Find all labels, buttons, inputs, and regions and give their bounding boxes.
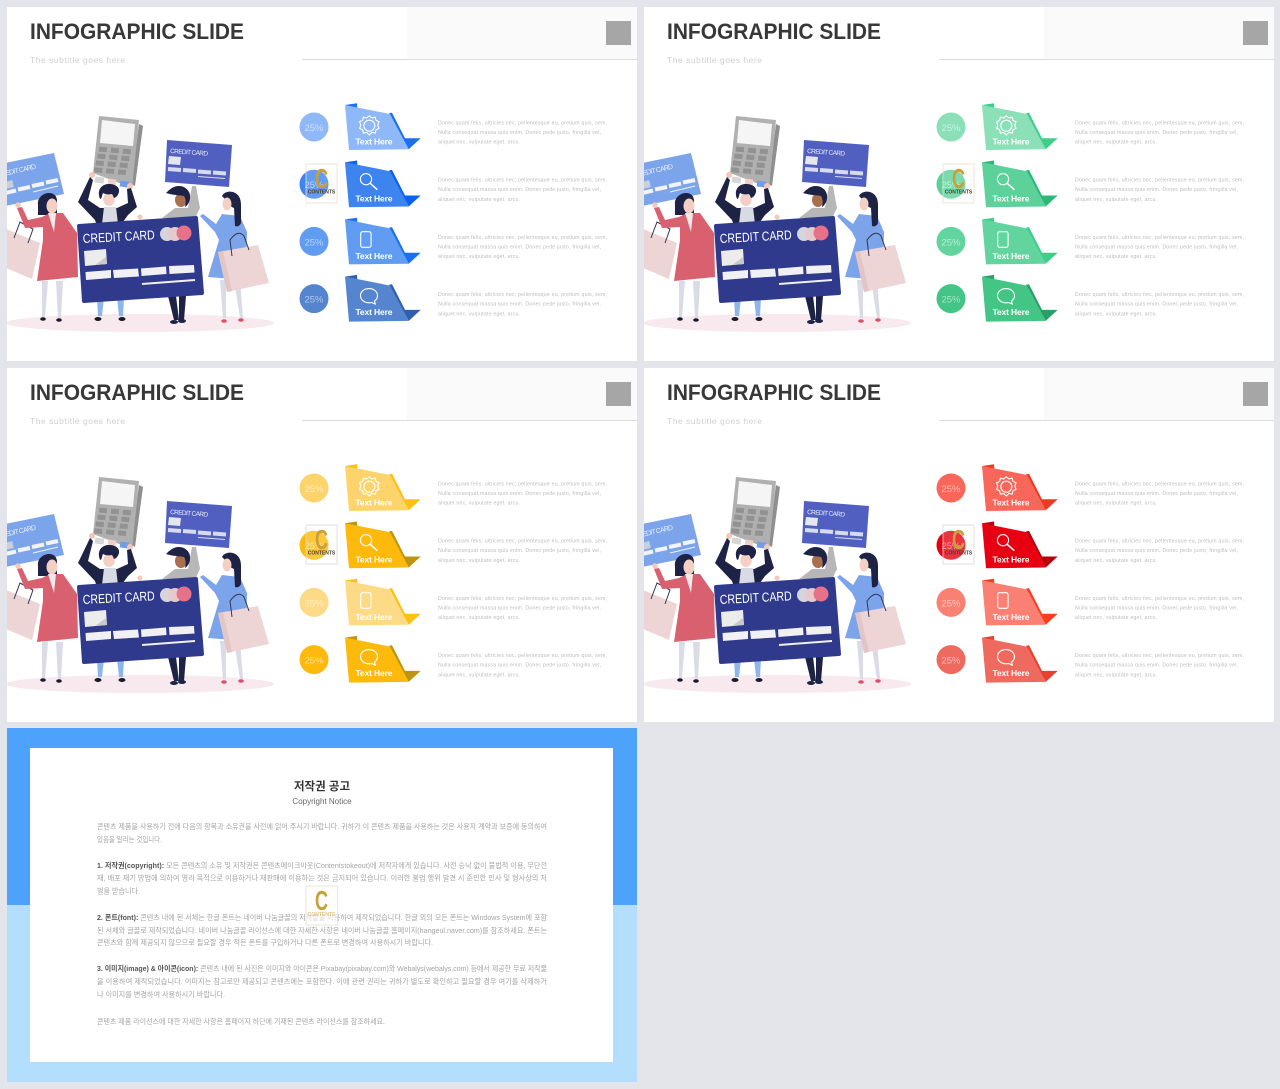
row 1: Donec quam felis, ultricies nec, pellentesque eu, pretium quis, sem, [438, 482, 607, 488]
row 4: aliquet nec, vulputate eget, arcu. [1075, 311, 1157, 317]
watermark [943, 524, 974, 564]
intro paragraph: 콘텐츠 제품을 사용하기 전에 다음의 항목과 소유권을 사전에 읽어 주시기 바랍니다. 귀하가 이 콘텐츠 제품을 사용하는 것은 사용자 계약과 보증에 동의하여 [97, 822, 547, 831]
section 2: font [97, 913, 547, 947]
row 4: Donec quam felis, ultricies nec, pellentesque eu, pretium quis, sem, [1075, 653, 1244, 659]
row 3: 25% [941, 598, 961, 609]
row 2 [300, 160, 607, 207]
row 2: Text Here [356, 555, 393, 565]
watermark: CONTENTS [945, 550, 973, 556]
illustration: people with credit cards [633, 116, 911, 332]
watermark: CONTENTS [308, 190, 336, 196]
row 4: aliquet nec, vulputate eget, arcu. [438, 672, 520, 678]
row 2: aliquet nec, vulputate eget, arcu. [438, 558, 520, 564]
section 3: image and icon [97, 964, 547, 999]
row 4: Donec quam felis, ultricies nec, pellentesque eu, pretium quis, sem, [438, 292, 607, 298]
illustration: people with credit cards [633, 477, 911, 693]
title: INFOGRAPHIC SLIDE [667, 380, 881, 405]
illustration: people with credit cards: CREDIT CARD [170, 148, 209, 158]
row 4: Text Here [992, 307, 1030, 317]
row 2: Text Here [992, 194, 1030, 204]
row 4: 25% [941, 295, 961, 306]
row 3 [936, 579, 1244, 625]
row 4: 25% [941, 656, 961, 667]
row 2: Donec quam felis, ultricies nec, pellentesque eu, pretium quis, sem, [1075, 539, 1244, 545]
row 2: Nulla consequat massa quis enim. Donec pede justo, fringilla vel, [1075, 187, 1238, 193]
title: INFOGRAPHIC SLIDE [667, 19, 881, 44]
watermark: C [952, 163, 965, 194]
watermark: C [952, 524, 965, 555]
row 2: 25% [941, 180, 961, 191]
grey square [1243, 382, 1268, 406]
row 2: 25% [304, 180, 324, 191]
watermark: CONTENTS [308, 912, 336, 918]
row 1: Nulla consequat massa quis enim. Donec pede justo, fringilla vel, [1075, 130, 1238, 136]
illustration: people with credit cards: CREDIT CARD [82, 588, 155, 607]
section 1: copyright [97, 861, 547, 896]
illustration: people with credit cards [0, 116, 274, 332]
row 1: aliquet nec, vulputate eget, arcu. [438, 140, 520, 146]
row 2: 25% [941, 541, 961, 552]
row 1: Nulla consequat massa quis enim. Donec pede justo, fringilla vel, [1075, 491, 1238, 497]
row 1 [300, 103, 607, 150]
section 2: font: 된 서체와 글꼴로 제작되었습니다. 네이버 나눔글꼴 라이선스에 대한 자세한 사항은 네이버 나눔글꼴 홈페이지(hangeul.naver.com)를 참조하세요. 폰트는 [97, 926, 547, 935]
row 3: aliquet nec, vulputate eget, arcu. [1075, 615, 1157, 621]
subtitle: The subtitle goes here [30, 416, 125, 426]
illustration: people with credit cards: CREDIT CARD [170, 509, 209, 519]
watermark [306, 524, 337, 564]
slide 4: red [633, 368, 1274, 722]
illustration: people with credit cards [0, 477, 274, 693]
row 3 [936, 218, 1244, 264]
row 1: aliquet nec, vulputate eget, arcu. [1075, 140, 1157, 146]
row 3: aliquet nec, vulputate eget, arcu. [438, 615, 520, 621]
row 2 [300, 522, 607, 568]
row 2: Donec quam felis, ultricies nec, pellentesque eu, pretium quis, sem, [1075, 178, 1244, 184]
section 2: font: 2. 폰트(font): 콘텐츠 내에 된 서체는 한글 폰트는 네이버 나눔글꼴의 저작물을 이용하여 제작되었습니다. 한글 외의 모든 폰트는 Windows System에 포함 [97, 913, 547, 922]
row 4 [936, 636, 1244, 683]
watermark [306, 885, 338, 925]
watermark [943, 163, 974, 203]
row 1: Donec quam felis, ultricies nec, pellentesque eu, pretium quis, sem, [438, 120, 607, 126]
grey square [1243, 21, 1268, 45]
illustration: people with credit cards: CREDIT CARD [82, 227, 155, 246]
row 2: 25% [304, 541, 324, 552]
watermark [306, 163, 337, 203]
row 1: Text Here [356, 498, 393, 508]
row 3: Donec quam felis, ultricies nec, pellentesque eu, pretium quis, sem, [438, 235, 607, 241]
row 3: Donec quam felis, ultricies nec, pellentesque eu, pretium quis, sem, [1075, 235, 1244, 241]
illustration: people with credit cards: CREDIT CARD [633, 164, 674, 179]
subtitle: The subtitle goes here [667, 55, 762, 65]
row 2: Donec quam felis, ultricies nec, pellentesque eu, pretium quis, sem, [438, 539, 607, 545]
illustration: people with credit cards: CREDIT CARD [633, 525, 674, 540]
watermark: CONTENTS [945, 190, 973, 196]
row 2: Text Here [992, 555, 1030, 565]
slide 3: yellow [0, 368, 637, 722]
row 1: aliquet nec, vulputate eget, arcu. [1075, 501, 1157, 507]
row 2: Nulla consequat massa quis enim. Donec pede justo, fringilla vel, [438, 187, 601, 193]
grey square [606, 382, 631, 406]
row 3: Text Here [992, 612, 1030, 622]
row 4: Nulla consequat massa quis enim. Donec pede justo, fringilla vel, [438, 663, 601, 669]
title: INFOGRAPHIC SLIDE [30, 19, 244, 44]
row 4: Text Here [356, 668, 393, 678]
row 3: 25% [941, 237, 961, 248]
row 2 [936, 160, 1244, 207]
row 4: 25% [304, 295, 324, 306]
row 1: 25% [304, 123, 324, 134]
row 3: 25% [304, 598, 324, 609]
illustration: people with credit cards: CREDIT CARD [807, 148, 846, 158]
row 3: aliquet nec, vulputate eget, arcu. [438, 254, 520, 260]
section 2: font: 콘텐츠와 함께 제공되지 않으므로 필요할 경우 적은 폰트를 구입하거나 다른 폰트로 변경하여 사용하시기 바랍니다. [97, 938, 433, 947]
section 3: image and icon: 을 이용하여 제작되었습니다. 이미지는 참고로만 제공되고 콘텐츠에는 포함한다. 이에 관련 권리는 귀하가 별도로 확인하고 필요할 경우 여기를 삭제하거 [97, 977, 547, 986]
section 3: image and icon: 3. 이미지(image) & 아이콘(icon): 콘텐츠 내에 된 사진은 이미지와 아이콘은 Pixabay(pixabay.com)와 Webalys(webalys.com) 등에서 제공한 무료 저작물 [97, 964, 547, 973]
row 3: Text Here [992, 251, 1030, 261]
row 1 [300, 464, 607, 511]
row 1: aliquet nec, vulputate eget, arcu. [438, 501, 520, 507]
row 2: aliquet nec, vulputate eget, arcu. [438, 197, 520, 203]
row 4: Donec quam felis, ultricies nec, pellentesque eu, pretium quis, sem, [438, 653, 607, 659]
row 4: aliquet nec, vulputate eget, arcu. [1075, 672, 1157, 678]
intro paragraph [97, 822, 547, 844]
slide 5: copyright notice [7, 728, 637, 1082]
row 3: Donec quam felis, ultricies nec, pellentesque eu, pretium quis, sem, [1075, 596, 1244, 602]
slide 2: green [633, 7, 1274, 361]
row 3 [300, 579, 607, 625]
watermark: C [315, 524, 328, 555]
illustration: people with credit cards: CREDIT CARD [719, 588, 792, 607]
notice heading: 저작권 공고 [294, 779, 350, 793]
row 4 [936, 275, 1244, 322]
row 2: Nulla consequat massa quis enim. Donec pede justo, fringilla vel, [438, 548, 601, 554]
row 2 [936, 522, 1244, 568]
row 3: Nulla consequat massa quis enim. Donec pede justo, fringilla vel, [1075, 605, 1238, 611]
row 2: aliquet nec, vulputate eget, arcu. [1075, 558, 1157, 564]
row 3: Nulla consequat massa quis enim. Donec pede justo, fringilla vel, [438, 605, 601, 611]
watermark: CONTENTS [308, 550, 336, 556]
row 1: 25% [941, 123, 961, 134]
row 1: Text Here [992, 136, 1030, 146]
row 4: 25% [304, 656, 324, 667]
closing line: 콘텐츠 제품 라이선스에 대한 자세한 사항은 홈페이지 하단에 기재된 콘텐츠 라이선스를 참조하세요. [97, 1017, 385, 1026]
row 4: Donec quam felis, ultricies nec, pellentesque eu, pretium quis, sem, [1075, 292, 1244, 298]
row 3: Nulla consequat massa quis enim. Donec pede justo, fringilla vel, [438, 244, 601, 250]
row 3: Donec quam felis, ultricies nec, pellentesque eu, pretium quis, sem, [438, 596, 607, 602]
row 1: 25% [941, 484, 961, 495]
row 1 [936, 464, 1244, 511]
illustration: people with credit cards: CREDIT CARD [807, 509, 846, 519]
watermark: C [315, 163, 328, 194]
watermark: C [315, 885, 328, 916]
row 1: Text Here [992, 498, 1030, 508]
row 4: Nulla consequat massa quis enim. Donec pede justo, fringilla vel, [1075, 663, 1238, 669]
subtitle: The subtitle goes here [667, 416, 762, 426]
intro paragraph: 있음을 알리는 것입니다. [97, 835, 162, 844]
section 3: image and icon: 나 이미지를 변경하여 사용하시기 바랍니다. [97, 990, 225, 999]
row 2: Text Here [356, 194, 393, 204]
row 1: Text Here [356, 136, 393, 146]
row 3: Text Here [356, 251, 393, 261]
row 2: Nulla consequat massa quis enim. Donec pede justo, fringilla vel, [1075, 548, 1238, 554]
row 3: 25% [304, 237, 324, 248]
row 4 [300, 275, 607, 322]
row 3: aliquet nec, vulputate eget, arcu. [1075, 254, 1157, 260]
row 1: Donec quam felis, ultricies nec, pellentesque eu, pretium quis, sem, [1075, 120, 1244, 126]
row 2: Donec quam felis, ultricies nec, pellentesque eu, pretium quis, sem, [438, 178, 607, 184]
row 3 [300, 218, 607, 264]
section 1: copyright: 벌을 받습니다. [97, 886, 140, 896]
slide 1: blue [0, 7, 637, 361]
row 1 [936, 103, 1244, 150]
row 1: Nulla consequat massa quis enim. Donec pede justo, fringilla vel, [438, 130, 601, 136]
illustration: people with credit cards: CREDIT CARD [719, 227, 792, 246]
row 1: 25% [304, 484, 324, 495]
row 2: aliquet nec, vulputate eget, arcu. [1075, 197, 1157, 203]
row 4: Nulla consequat massa quis enim. Donec pede justo, fringilla vel, [1075, 302, 1238, 308]
row 4: Text Here [356, 307, 393, 317]
row 4: Nulla consequat massa quis enim. Donec pede justo, fringilla vel, [438, 302, 601, 308]
notice subheading: Copyright Notice [292, 797, 352, 806]
row 4 [300, 636, 607, 683]
section 1: copyright: 1. 저작권(copyright): 모든 콘텐츠의 소유 및 저작권은 콘텐츠메이크아웃(Contentstokeout)에 저작자에게 있습니다. 사전 승낙 없이 불법적 이용, 무단전 [97, 861, 547, 870]
row 3: Text Here [356, 612, 393, 622]
row 1: Donec quam felis, ultricies nec, pellentesque eu, pretium quis, sem, [1075, 482, 1244, 488]
row 3: Nulla consequat massa quis enim. Donec pede justo, fringilla vel, [1075, 244, 1238, 250]
subtitle: The subtitle goes here [30, 55, 125, 65]
row 1: Nulla consequat massa quis enim. Donec pede justo, fringilla vel, [438, 491, 601, 497]
grey square [606, 21, 631, 45]
section 1: copyright: 재, 배포 재기 방법에 의하여 영리 목적으로 이용하거나 재판매에 이용하는 것은 금지되어 있습니다. 이러한 불법 행위 발견 시 준민한 민사 및 형사상의 처 [97, 874, 547, 882]
row 4: Text Here [992, 668, 1030, 678]
title: INFOGRAPHIC SLIDE [30, 380, 244, 405]
row 4: aliquet nec, vulputate eget, arcu. [438, 311, 520, 317]
